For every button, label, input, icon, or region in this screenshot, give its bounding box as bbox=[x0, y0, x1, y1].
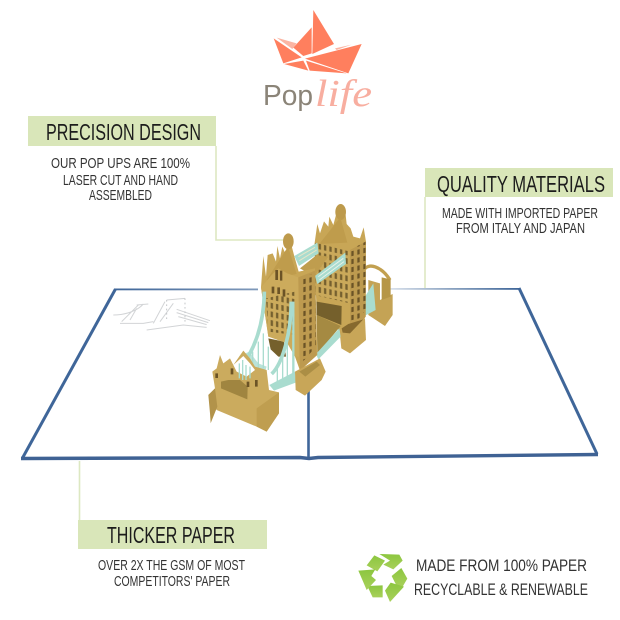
text block: precision design: LASER CUT AND HAND bbox=[63, 172, 178, 189]
heading band: precision design bbox=[28, 116, 216, 146]
panel: precision design bbox=[28, 116, 216, 204]
heading band: precision design: PRECISION DESIGN bbox=[46, 119, 201, 145]
text block: recyclable bbox=[414, 556, 588, 599]
near gatehouse bbox=[208, 351, 279, 432]
text block: thicker paper: COMPETITORS' PAPER bbox=[114, 573, 230, 590]
icon: origami paper boat bbox=[274, 10, 362, 73]
text block: quality materials bbox=[442, 205, 598, 237]
near tower base bbox=[295, 358, 326, 396]
logo wordmark: life bbox=[315, 73, 372, 115]
near tower bbox=[261, 233, 317, 371]
text block: thicker paper bbox=[98, 557, 245, 590]
bridge deck between towers bbox=[316, 328, 341, 359]
logo wordmark bbox=[263, 73, 372, 115]
text block: precision design: OUR POP UPS ARE 100% bbox=[51, 155, 190, 172]
logo wordmark: Pop bbox=[263, 80, 313, 112]
pop-up tower bridge bbox=[208, 204, 393, 432]
far side span bbox=[359, 266, 393, 326]
far tower bbox=[314, 204, 366, 354]
ghost bridge imprint on card bbox=[113, 298, 210, 330]
heading band: thicker paper bbox=[78, 520, 267, 549]
text block: thicker paper: OVER 2X THE GSM OF MOST bbox=[98, 557, 245, 574]
panel: recyclable bbox=[358, 554, 588, 602]
upper walkways bbox=[294, 243, 346, 284]
icon: recycle symbol bbox=[358, 554, 407, 602]
near bridge deck bbox=[269, 372, 296, 391]
near left span hangers bbox=[239, 333, 287, 382]
text block: precision design: ASSEMBLED bbox=[89, 187, 152, 204]
panel: quality materials bbox=[425, 168, 613, 237]
heading band: thicker paper: THICKER PAPER bbox=[107, 522, 235, 548]
text block: precision design bbox=[51, 155, 190, 204]
near tower suspension cables bbox=[240, 292, 293, 380]
far tower base bbox=[339, 318, 366, 353]
panel: thicker paper bbox=[78, 520, 267, 590]
connector lines bbox=[80, 146, 425, 520]
logo: Poplife bbox=[263, 10, 372, 115]
open card outline bbox=[21, 288, 598, 459]
